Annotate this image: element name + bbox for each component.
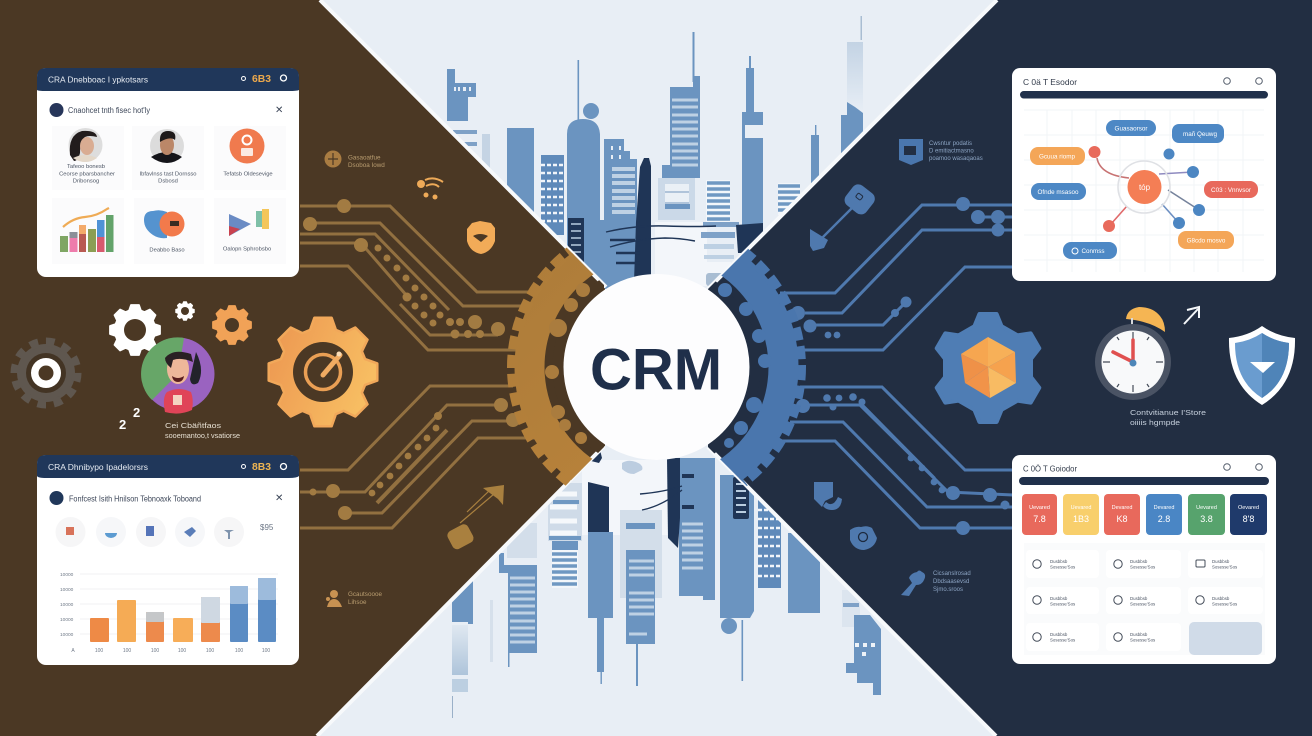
list cards: Dusbbsb [1050,596,1068,601]
chart: bar chart: 10000 [60,632,74,638]
panel: bottom-right KPI dashboard [1012,455,1276,664]
center circle: CRM: CRM [590,338,722,402]
panel: top-left dashboard [37,68,299,277]
KPI tiles: Uevared [1029,505,1050,511]
KPI tiles: K8 [1116,514,1128,524]
list cards: Dusbbsb [1212,596,1230,601]
chart: bar chart: 10000 [60,617,74,623]
icon: blue wrench and caption [901,570,971,596]
panel: right navy section [708,0,1312,736]
node map: center hub: tóp [1139,183,1151,192]
diagonal divider lines [317,0,997,736]
panel: top-left dashboard: CRA Dnebboac I ypkotsars [48,74,148,84]
icon row: metric circles: $95 [260,523,274,532]
avatar: woman portrait [68,128,102,162]
panel: bottom-left bar chart dashboard: 8B3 [252,462,271,473]
icon: blue shield [1229,326,1295,405]
list cards: Sosesse'Sos [1050,564,1076,570]
avatar: man portrait [150,129,184,163]
panel: top-left dashboard: Tafeoo bonesb [67,164,105,170]
avatar: woman in purple and green circle [141,337,214,414]
node map: labelled pills: Ofnde msasoo [1038,189,1079,196]
list cards: Sosesse'Sos [1130,564,1156,570]
KPI tiles: 1B3 [1073,514,1089,524]
list cards: Sosesse'Sos [1212,602,1238,606]
icon: white gear [110,305,160,355]
icon: blue wrench and caption: Sjmo.sroos [933,587,963,593]
icon: play triangle and bars [229,209,269,236]
panel: top-left dashboard: 6B3 [252,74,271,85]
panel: top-left dashboard: Cnaohcet tnth fisec hot'ly [68,106,150,115]
icon: blue badge and caption: Cwsntur podatis [929,141,972,147]
icon: orange gear [213,306,251,344]
panel: top-right node map: C 0ä T Esodor [1023,77,1077,87]
text: customer caption: sooemantoo,t vsatiorse [165,433,240,440]
icon: blue wrench and caption: Dbdsaasevsd [933,579,969,585]
KPI tiles: 7.8 [1033,514,1046,524]
chart: bar chart: 100 [262,648,270,654]
icon: wifi [417,178,443,200]
panel: bottom-left bar chart dashboard: ✕ [275,493,283,504]
text: customer caption: Cei Cbäñtfaos [165,423,222,430]
KPI tiles: Oevared [1238,505,1259,511]
node map: labelled pills: Conmss [1081,248,1105,255]
icon: gold arrow [446,485,504,551]
icon: gold shield face [467,221,495,254]
list cards: Sosesse'Sos [1130,638,1156,642]
node map: labelled pills: Guasaorsor [1115,126,1147,132]
text: clock caption: oiiiis hgmpde [1130,418,1180,427]
chart: bar chart: 10000 [60,587,74,593]
chart: bar chart: 100 [95,648,103,654]
icon: gold badge and caption: Dsoboa Iowd [348,162,385,169]
node map: labelled pills: G8cdo mosvo [1187,238,1226,244]
chart: bar chart: 10000 [60,572,74,578]
circuit traces: left [300,199,537,528]
list cards: Dusbbsb [1212,559,1230,564]
icon: blue badge and caption [899,139,983,165]
chart: bar chart: 100 [235,648,243,654]
list cards: Sosesse'Sos [1050,602,1076,606]
list cards [1024,543,1265,655]
icon: overlapping blue and orange shapes [144,210,184,238]
chart: bar chart: A [71,648,75,654]
KPI tiles: Uevared [1196,505,1217,511]
icon: gold badge and caption: Gasaoatfue [348,154,381,162]
text: customer caption [165,423,240,440]
chart: bar chart: 100 [178,648,186,654]
text: question marks [119,405,140,432]
KPI tiles: Devared [1112,505,1132,511]
icon: blue round lock [850,526,877,550]
icon: stopwatch clock [1095,307,1171,400]
list cards: Dusbbsb [1130,632,1148,637]
icon: gold person and caption [326,590,382,607]
icon: blue badge and caption: poamoo wasaqaoas [929,156,983,162]
icon: blue arrow curl [814,482,842,510]
text: question marks: 2 [119,417,126,432]
panel: bottom-left bar chart dashboard [37,455,299,665]
icon: gold person and caption: Lihsoe [348,599,367,606]
icon: orange support badge [230,128,264,164]
panel: top-left dashboard: Dribonsog [73,178,99,184]
KPI tiles: Uevared [1071,505,1091,511]
center circle: CRM [564,274,750,460]
list cards: Dusbbsb [1050,559,1068,564]
panel: left brown section [0,0,605,736]
icon: blue badge and caption: D emitiactmasno [929,148,974,154]
panel: top-left dashboard: Ibfavlnss tast Dornsso [139,172,197,178]
KPI tiles: Devared [1154,505,1174,511]
list cards: Dusbbsb [1130,596,1148,601]
KPI tiles: 2.8 [1158,514,1170,524]
large gear: left half [507,248,604,486]
KPI tiles [1022,494,1267,535]
chart: bar chart: 100 [151,648,159,654]
panel: top-left dashboard: Ceorse pbarsbancher [59,172,115,178]
icon: large target gear [269,318,377,426]
chart: mini bar and line chart [60,208,114,252]
icon: small white gear [176,302,194,320]
list cards: Dusbbsb [1130,559,1148,564]
node map: labelled pills: Gcuua riomp [1039,154,1076,160]
text: clock caption: Contvitianue I'Store [1130,408,1206,417]
panel: top-left dashboard: Tefatsb Oldesevige [223,172,273,178]
list cards: Sosesse'Sos [1212,564,1238,570]
arrow: white up-right [1184,307,1199,324]
panel: top-left dashboard: ✕ [275,105,283,116]
panel: bottom-left bar chart dashboard: CRA Dhnibypo Ipadelorsrs [48,462,148,472]
icon: blue key pin [810,182,878,251]
panel: bottom-right KPI dashboard: C 0Ö T Goiodor [1023,464,1077,474]
node map: labelled pills: mañ Qeuwg [1183,131,1217,138]
KPI tiles: 3.8 [1200,514,1213,524]
icon: grey gear [15,342,77,404]
panel: top-left dashboard: Dsbosd [158,178,178,184]
chart: bar chart: 100 [123,648,131,654]
icon: blue gear with orange hexagon [937,314,1039,422]
skyline: top city [447,16,863,289]
panel: top-left dashboard: Oalopn Sphrobsbo [223,246,271,252]
node map: connectors [1097,158,1196,224]
circuit traces: right [780,197,1013,535]
node map: center hub [1128,170,1162,204]
node map: labelled pills: C03 : Vnnvsor [1211,187,1251,194]
panel: bottom-left bar chart dashboard: Fonfcest Isith Hnilson Tebnoaxk Toboand [69,494,201,504]
KPI tiles: 8'8 [1243,514,1254,524]
list cards: Sosesse'Sos [1050,638,1076,642]
panel: top-right node map [1012,68,1276,281]
icon: gold person and caption: Gcautsoooe [348,591,382,598]
icon: blue wrench and caption: Cicsanslrosad [933,571,971,577]
large gear: right half [708,248,806,486]
skyline: bottom city [452,450,881,718]
chart: bar chart: 100 [206,648,214,654]
icon: gold badge and caption [324,150,385,169]
chart: bar chart [60,572,278,654]
panel: top-left dashboard: Deabbo Baso [149,248,185,254]
text: question marks: 2 [133,405,140,420]
list cards: Dusbbsb [1050,632,1068,637]
text: clock caption [1130,408,1206,427]
node map: labelled pills [1030,120,1258,259]
chart: bar chart: 10000 [60,602,74,608]
list cards: Sosesse'Sos [1130,602,1156,606]
icon row: metric circles [56,517,274,547]
